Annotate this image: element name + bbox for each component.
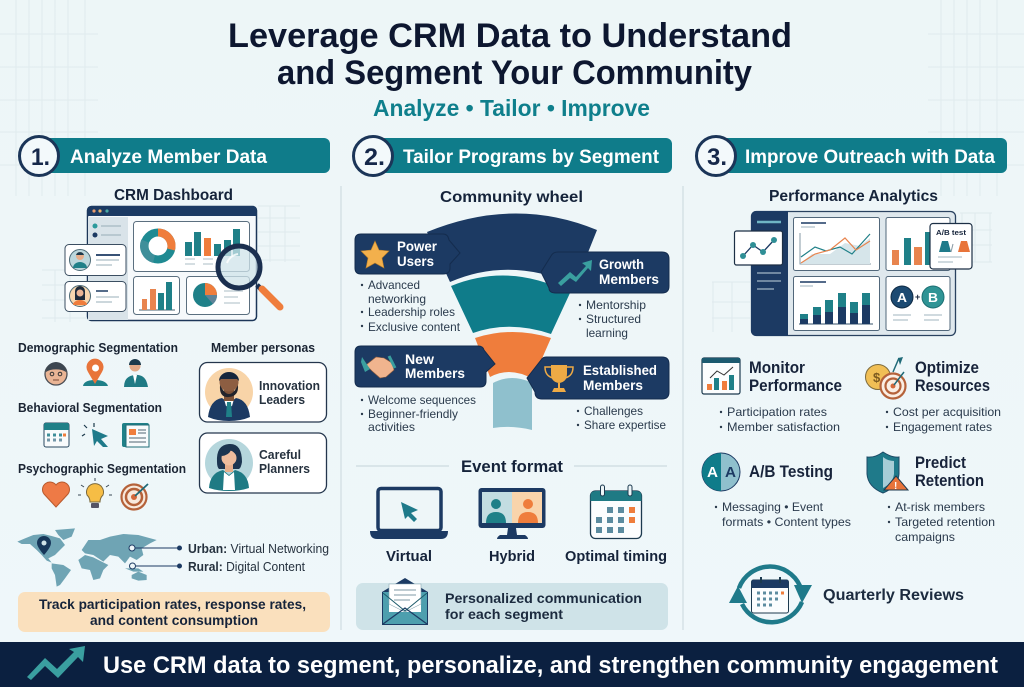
heading: demographic segmentation: Demographic Segmentation [18, 340, 178, 355]
heading: community wheel: Community wheel [440, 189, 583, 206]
item: monitor performance: Monitor [749, 359, 806, 377]
callout: established members [527, 357, 669, 399]
icon: location pin [83, 359, 108, 386]
callout: personalized communication [356, 578, 668, 630]
icon: calendar [44, 423, 69, 447]
card: Careful Planners persona [200, 433, 326, 493]
callout: track participation: and content consumption [90, 612, 258, 628]
item: optimize resources: Optimize [915, 359, 979, 377]
illustration: analytics dashboard: A [897, 290, 908, 305]
title: Leverage CRM Data to Understand [228, 17, 792, 55]
list: new members [361, 393, 476, 434]
list: optimize resources: Engagement rates [893, 420, 992, 434]
icon: laptop virtual [370, 488, 448, 539]
footer banner [0, 642, 1024, 687]
illustration: analytics dashboard [712, 211, 992, 336]
list: monitor performance [720, 405, 840, 434]
item: monitor performance: Performance [749, 377, 842, 395]
list: power users: networking [368, 292, 426, 306]
section header 3 [696, 136, 1007, 176]
icon: A/B circle: A [707, 464, 718, 481]
heading: member personas: Member personas [211, 340, 315, 355]
item: predict retention: Retention [915, 472, 984, 490]
label: virtual: Virtual [386, 549, 432, 565]
list: power users: Exclusive content [368, 320, 461, 334]
icon: A/B circle [702, 453, 740, 491]
list: monitor performance: Participation rates [727, 405, 827, 419]
icon: growth arrow [27, 646, 85, 680]
heading: CRM Dashboard: CRM Dashboard [114, 187, 233, 204]
heading: event format: Event format [461, 457, 563, 476]
label: urban: Urban: Virtual Networking [188, 542, 329, 556]
callout: personalized communication: for each segment [445, 606, 563, 622]
icon: A/B circle: A [725, 464, 736, 481]
card: member profile 2 [65, 282, 126, 312]
card: floating line chart [734, 231, 782, 265]
label: optimal timing: Optimal timing [565, 549, 667, 565]
callout: established members: Members [583, 377, 643, 393]
callout: track participation [18, 592, 330, 632]
label: Careful Planners: Careful [259, 448, 301, 462]
label: Careful Planners: Planners [259, 462, 310, 476]
callout: new members: Members [405, 365, 465, 381]
label: hybrid: Hybrid [489, 549, 535, 565]
list: predict retention: Targeted retention [895, 515, 995, 529]
list: power users: Advanced [368, 278, 420, 292]
icon: envelope [382, 578, 428, 625]
item: monitor performance [702, 358, 842, 395]
illustration: analytics dashboard: + [915, 292, 920, 302]
title: and Segment Your Community [277, 54, 752, 92]
list: growth members [579, 298, 646, 340]
subtitle: Analyze • Tailor • Improve [373, 95, 650, 121]
icon: clicking cursor [82, 423, 108, 447]
item: optimize resources: Resources [915, 377, 990, 395]
section header 3: 3. [707, 144, 727, 171]
illustration: analytics dashboard: B [928, 290, 938, 305]
section header 2: Tailor Programs by Segment [403, 147, 660, 168]
list: A/B testing: Messaging • Event [722, 500, 824, 514]
label: Careful Planners [259, 448, 310, 476]
panel: tailor programs by segment [354, 136, 672, 630]
icon: calendar optimal timing [590, 485, 642, 538]
card: member profile 1 [65, 244, 126, 276]
list: A/B testing: formats • Content types [722, 515, 851, 529]
list: power users: Leadership roles [368, 305, 455, 319]
callout: track participation: Track participation rates, response rates, [39, 596, 306, 612]
callout: growth members [541, 252, 669, 293]
icon: business person [124, 359, 148, 387]
callout: power users: Users [397, 253, 434, 269]
list: growth members: Mentorship [586, 298, 646, 312]
list: power users [361, 278, 461, 334]
icon: light bulb [78, 478, 112, 508]
list: predict retention [888, 500, 995, 544]
card: A/B test: A/B test [936, 228, 967, 237]
section header 2 [354, 136, 672, 176]
callout: personalized communication: Personalized communication [445, 590, 642, 606]
label: Innovation Leaders: Leaders [259, 393, 305, 407]
icon: monitor chart [702, 358, 740, 394]
item: optimize resources [866, 357, 990, 398]
list: predict retention: At-risk members [895, 500, 985, 514]
list: growth members: learning [586, 326, 628, 340]
list: predict retention: campaigns [895, 530, 955, 544]
label: Innovation Leaders [259, 379, 320, 407]
item: quarterly reviews [729, 567, 964, 622]
item: predict retention: Predict [915, 454, 966, 472]
list: new members: Beginner-friendly [368, 407, 458, 421]
list: monitor performance: Member satisfaction [727, 420, 840, 434]
callout: new members: New [405, 351, 434, 367]
heading: behavioral segmentation: Behavioral Segmentation [18, 400, 162, 415]
list: established members: Challenges [584, 404, 643, 418]
icon: face [45, 362, 67, 385]
heading: performance analytics: Performance Analytics [769, 188, 938, 205]
icon: coin and target: $ [873, 370, 881, 385]
list: optimize resources [886, 405, 1001, 434]
card: A/B test [930, 224, 972, 269]
callout: power users [355, 234, 460, 274]
callout: new members [355, 346, 495, 387]
item: predict retention [867, 452, 984, 493]
callout: growth members: Growth [599, 256, 644, 272]
list: new members: activities [368, 420, 415, 434]
callout: power users: Power [397, 238, 438, 254]
list: optimize resources: Cost per acquisition [893, 405, 1001, 419]
chart: community wheel funnel [427, 213, 597, 430]
panel: improve outreach with data [696, 136, 1007, 622]
panel: analyze member data [17, 136, 330, 632]
item: A/B testing [702, 453, 833, 491]
label: Innovation Leaders: Innovation [259, 379, 320, 393]
icon: target [122, 484, 148, 510]
list: A/B testing [715, 500, 851, 529]
item: A/B testing: A/B Testing [749, 463, 833, 481]
world map with urban and rural callouts [17, 528, 329, 587]
section header 1: Analyze Member Data [70, 147, 267, 168]
list: established members: Share expertise [584, 418, 666, 432]
callout: growth members: Members [599, 271, 659, 287]
callout: established members: Established [583, 362, 657, 378]
section header 2: 2. [364, 144, 385, 171]
illustration: CRM dashboard [42, 206, 300, 322]
section header 1 [20, 136, 330, 176]
list: established members [577, 404, 666, 432]
section header 1: 1. [31, 144, 50, 171]
list: new members: Welcome sequences [368, 393, 476, 407]
heading: psychographic segmentation: Psychographic Segmentation [18, 461, 186, 476]
section header 3: Improve Outreach with Data [745, 147, 995, 168]
item: quarterly reviews: Quarterly Reviews [823, 587, 964, 604]
icon: shield with warning: ! [894, 481, 897, 492]
icon: heart [43, 482, 69, 507]
list: growth members: Structured [586, 312, 641, 326]
title [228, 17, 792, 92]
icon: hybrid monitor [478, 488, 546, 539]
footer banner: Use CRM data to segment, personalize, and strengthen community engagement [103, 652, 998, 679]
label: rural: Rural: Digital Content [188, 560, 306, 574]
card: Innovation Leaders persona [200, 362, 326, 422]
icon: newsletter [122, 423, 149, 447]
icon: calendar cycle [729, 567, 812, 622]
